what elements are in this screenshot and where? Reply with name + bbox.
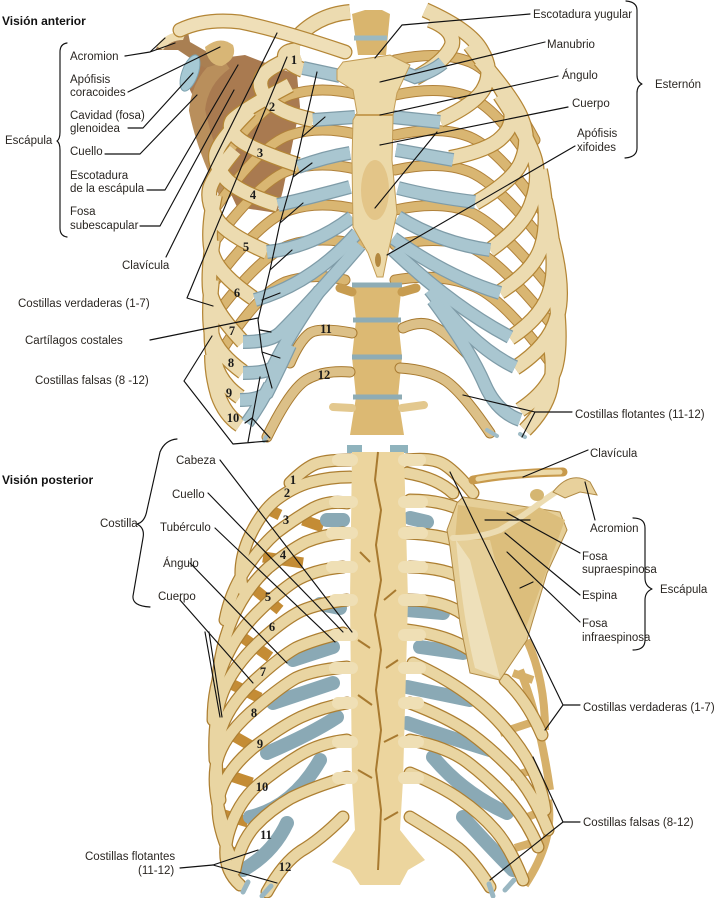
sternum [337, 55, 410, 277]
thoracic and lumbar spine [333, 283, 424, 435]
anterior labels, scapula group: Cavidad (fosa) [70, 110, 145, 122]
anterior labels, scapula group: glenoidea [70, 123, 120, 135]
posterior labels, left: Costilla [100, 518, 138, 530]
anterior labels, scapula group: coracoides [70, 87, 126, 99]
rib numbers, posterior: 8 [251, 706, 257, 720]
anterior labels, rib group: Clavícula [122, 260, 170, 272]
posterior labels, right: Fosa [582, 551, 608, 563]
posterior labels, right: Fosa [582, 618, 608, 630]
anterior labels, scapula group: Apófisis [70, 74, 111, 86]
posterior labels, right: Clavícula [590, 448, 638, 460]
rib numbers, posterior: 5 [265, 590, 271, 604]
leader lines, anterior right [375, 14, 575, 437]
rib numbers, posterior: 4 [280, 548, 287, 562]
posterior labels, right [582, 448, 715, 829]
rib numbers, posterior: 10 [256, 780, 268, 794]
posterior labels, left: Costillas flotantes [85, 851, 175, 863]
anterior labels, sternum group: Esternón [655, 79, 701, 91]
posterior ribs seen through the thorax [212, 55, 552, 365]
anterior labels, sternum group: Cuerpo [572, 98, 610, 110]
posterior labels, left: Cuerpo [158, 591, 196, 603]
anterior labels, scapula group: subescapular [70, 220, 139, 232]
posterior labels, left: Tubérculo [160, 522, 211, 534]
anterior labels, sternum group: Manubrio [547, 39, 595, 51]
anterior labels, rib group: Cartílagos costales [25, 335, 123, 347]
rib numbers, posterior: 7 [260, 665, 266, 679]
anterior labels, rib group [18, 260, 170, 387]
anterior labels, scapula group: Cuello [70, 146, 103, 158]
posterior labels, right: Escápula [660, 584, 708, 596]
clavicle, anterior view [180, 21, 345, 52]
rib numbers, anterior: 10 [227, 411, 239, 425]
rib numbers, anterior: 8 [228, 356, 234, 370]
rib numbers, anterior: 1 [291, 53, 297, 67]
anterior labels, sternum group: Escotadura yugular [533, 9, 632, 21]
heading: anterior view: Visión anterior [2, 14, 86, 28]
rib numbers, posterior [251, 473, 296, 874]
anterior labels, sternum group: xifoides [577, 142, 616, 154]
costal cartilages [240, 63, 520, 423]
rib numbers, anterior: 9 [226, 386, 232, 400]
anterior rib parts seen behind the back ribs, left [218, 507, 323, 856]
anterior labels, scapula group: Fosa [70, 206, 96, 218]
posterior labels, left: (11-12) [138, 865, 174, 877]
anterior rib parts seen behind the back ribs, right [500, 640, 550, 885]
rib numbers, posterior: 6 [269, 620, 275, 634]
scapula, anterior view [155, 32, 300, 213]
rib numbers, anterior: 2 [269, 100, 275, 114]
rib numbers, anterior: 3 [257, 146, 263, 160]
posterior labels, left: Ángulo [163, 557, 199, 570]
anterior labels, scapula group: de la escápula [70, 183, 145, 195]
anterior labels, scapula group: Escotadura [70, 170, 129, 182]
panel: anterior rib cage illustration [155, 10, 560, 441]
rib numbers, posterior: 2 [284, 486, 290, 500]
brace: rib [133, 439, 177, 607]
posterior labels, left [85, 455, 216, 877]
anterior labels, rib group: Costillas falsas (8 -12) [35, 375, 149, 387]
posterior labels, right: infraespinosa [582, 632, 651, 644]
vertebral column, back view [332, 452, 425, 885]
cartilages seen from behind [243, 518, 513, 870]
brace: scapula, anterior [57, 43, 67, 237]
rib numbers, posterior: 1 [290, 473, 296, 487]
anterior labels, scapula group: Escápula [5, 135, 53, 147]
rib numbers, anterior [226, 53, 332, 425]
rib numbers, posterior: 11 [260, 828, 272, 842]
ribs 11 and 12 [267, 323, 490, 437]
rib numbers, anterior: 6 [234, 286, 240, 300]
rib numbers, posterior: 3 [283, 513, 289, 527]
posterior labels, right: Costillas falsas (8-12) [583, 817, 694, 829]
rib numbers, anterior: 4 [250, 188, 257, 202]
anterior labels, scapula group: Acromion [70, 51, 119, 63]
rib numbers, anterior: 5 [243, 240, 249, 254]
posterior labels, right: Acromion [590, 523, 639, 535]
clavicle and acromion, posterior view [473, 472, 563, 480]
anterior labels, sternum group: Costillas flotantes (11-12) [575, 409, 705, 421]
cervical vertebrae [352, 10, 390, 55]
anterior labels, rib group: Costillas verdaderas (1-7) [18, 298, 150, 310]
panel: posterior rib cage illustration [213, 449, 597, 896]
brace: scapula, posterior [633, 518, 652, 650]
rib numbers, anterior: 12 [318, 368, 330, 382]
anterior labels, sternum group: Ángulo [562, 69, 598, 82]
posterior labels, right: Costillas verdaderas (1-7) [583, 702, 715, 714]
floating rib tips [264, 430, 525, 441]
rib numbers, anterior: 11 [320, 322, 332, 336]
anterior labels, sternum group: Apófisis [577, 128, 618, 140]
brace: sternum [625, 1, 642, 158]
anterior labels, scapula group [5, 51, 145, 232]
heading: posterior view: Visión posterior [2, 473, 93, 487]
scapula, posterior view [447, 478, 597, 680]
rib numbers, posterior: 9 [257, 737, 263, 751]
posterior labels, right: supraespinosa [582, 564, 657, 576]
rib numbers, anterior: 7 [229, 324, 235, 338]
posterior labels, left: Cuello [172, 489, 205, 501]
posterior labels, left: Cabeza [176, 455, 216, 467]
posterior cartilage tips [243, 449, 514, 896]
posterior labels, right: Espina [582, 590, 618, 602]
back ribs [213, 459, 548, 892]
rib numbers, posterior: 12 [279, 860, 291, 874]
leader lines, posterior [180, 450, 595, 883]
anterior labels, sternum group [533, 9, 705, 421]
leader lines, anterior left [105, 33, 325, 444]
true and false ribs, bony part [209, 10, 560, 430]
